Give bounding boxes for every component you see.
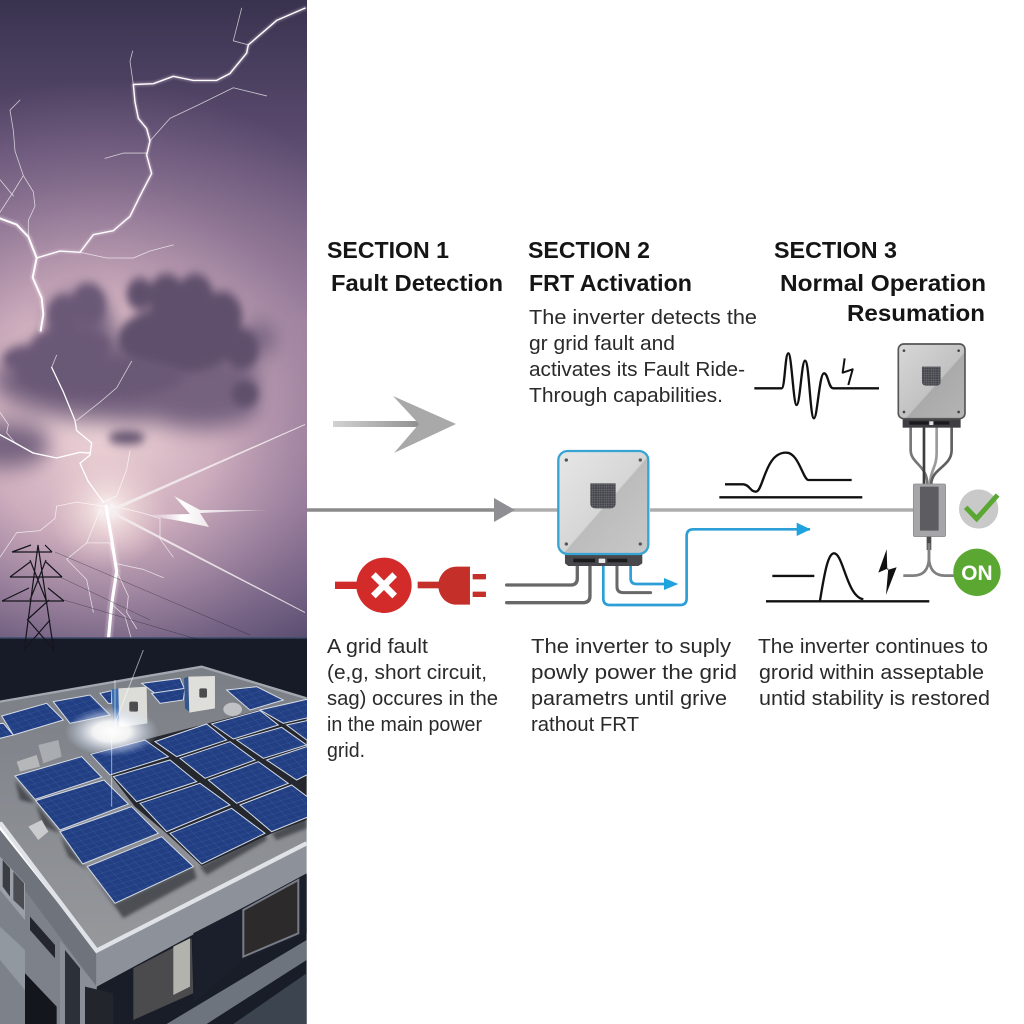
fault description text: grid. — [327, 739, 365, 762]
dark mounting gaps — [89, 699, 307, 866]
fault description text: in the main power — [327, 713, 482, 736]
resumption description text — [758, 635, 990, 710]
cables to junction box — [911, 428, 952, 483]
storm sky — [0, 0, 307, 645]
building walls — [0, 830, 307, 1024]
output cable — [903, 537, 955, 576]
FRT description text: rathout FRT — [531, 713, 639, 736]
panel shadows — [15, 780, 307, 918]
section 2 diagram — [335, 451, 810, 613]
section 2 heading: FRT Activation — [529, 270, 692, 296]
FRT activation text — [529, 306, 757, 407]
resumption description text: untid stability is restored — [759, 687, 990, 710]
icon: fault X — [335, 558, 412, 613]
waveform: fault oscillation — [754, 353, 879, 418]
FRT activation text: activates its Fault Ride- — [529, 358, 745, 381]
fault description text: (e,g, short circuit, — [327, 661, 487, 684]
white fault bolt icon — [145, 496, 268, 527]
section 3 heading: Resumation — [847, 300, 985, 326]
fault description text: sag) occures in the — [327, 687, 498, 710]
icon: ON badge: ON — [961, 562, 993, 585]
icon: lightning — [878, 549, 897, 595]
blue flow lines — [603, 529, 810, 605]
lightning bolts — [0, 8, 305, 640]
resumption description text: The inverter continues to — [758, 635, 988, 658]
blue arrowhead — [664, 578, 678, 590]
main inverter — [558, 451, 648, 554]
icon: ON badge — [953, 549, 1001, 596]
waveform: recovery hump — [719, 453, 862, 497]
section 3 heading — [774, 237, 986, 326]
fault description text — [327, 635, 498, 762]
light core — [62, 472, 155, 562]
FRT description text: parametrs until grive — [531, 687, 727, 710]
FRT description text: The inverter to suply — [531, 635, 732, 658]
roof edge trim — [0, 823, 307, 951]
section 1 heading — [327, 237, 503, 296]
strike flash — [65, 650, 158, 807]
fault description text: A grid fault — [327, 635, 428, 658]
FRT activation text: gr grid fault and — [529, 332, 675, 355]
section 2 heading — [528, 237, 692, 296]
section 3 diagram — [719, 344, 1001, 601]
fault rays — [110, 424, 305, 613]
icon: red plug — [418, 567, 486, 605]
transmission tower — [2, 545, 250, 652]
ground at horizon — [0, 637, 307, 700]
cables — [507, 566, 651, 603]
section 1 heading: SECTION 1 — [327, 237, 449, 263]
small line arrowhead — [494, 498, 515, 522]
rooftop with solar panels — [0, 650, 330, 1024]
section 3 heading: Normal Operation — [780, 270, 986, 296]
big grey arrow — [333, 396, 456, 453]
roof deck — [0, 667, 307, 952]
waveform: stabilised pulse — [766, 553, 929, 601]
section 1 heading: Fault Detection — [331, 270, 503, 296]
rooftop inverter right — [184, 676, 215, 713]
terminal strip — [565, 554, 642, 566]
solar panels — [0, 678, 330, 903]
FRT description text: powly power the grid — [531, 661, 737, 684]
divider line to inverter — [307, 508, 915, 512]
section 2 heading: SECTION 2 — [528, 237, 650, 263]
grid-side inverter — [898, 344, 965, 428]
panel: storm and rooftop photo — [0, 0, 330, 1024]
section 3 heading: SECTION 3 — [774, 237, 897, 263]
storm cloud — [0, 273, 277, 467]
rooftop equipment — [17, 703, 242, 840]
FRT activation text: Through capabilities. — [529, 384, 723, 407]
resumption description text: grorid within asseptable — [759, 661, 984, 684]
FRT description text — [531, 635, 737, 736]
junction box — [913, 484, 946, 537]
roof parapet — [0, 667, 307, 702]
FRT activation text: The inverter detects the — [529, 306, 757, 329]
rooftop inverter left — [112, 687, 147, 727]
icon: check mark — [959, 489, 998, 529]
blue arrowhead right — [797, 523, 811, 536]
